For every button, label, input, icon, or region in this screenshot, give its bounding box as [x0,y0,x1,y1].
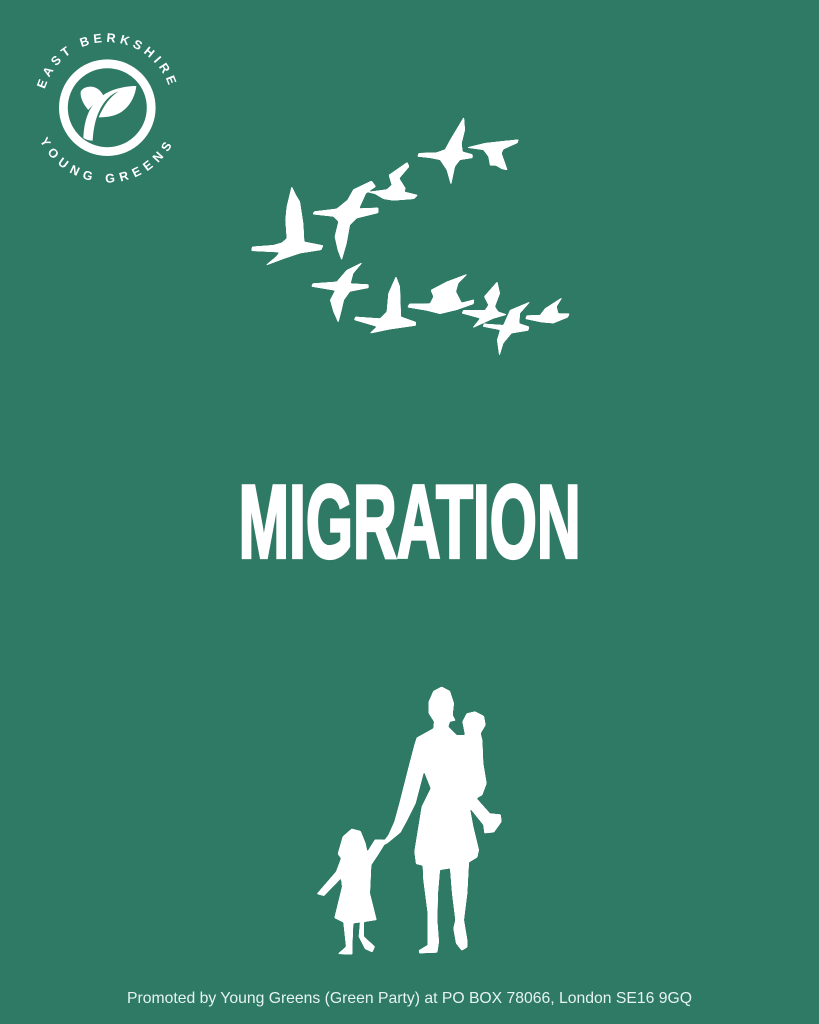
mother and baby silhouette [380,687,502,953]
illustration: mother carrying a baby and holding a child's hand [317,687,502,955]
child silhouette [317,829,387,955]
logo text: Young Greens: YOUNG GREENS [41,136,171,183]
logo: East Berkshire Young Greens [36,33,176,183]
title: MIGRATION [239,465,581,581]
icon: sprout [81,86,136,141]
footer imprint: Promoted by Young Greens (Green Party) at PO BOX 78066, London SE16 9GQ [127,990,692,1007]
logo text: East Berkshire: EAST BERKSHIRE [36,33,176,88]
illustration: flock of migrating birds [251,117,570,357]
logo ring [63,64,151,152]
